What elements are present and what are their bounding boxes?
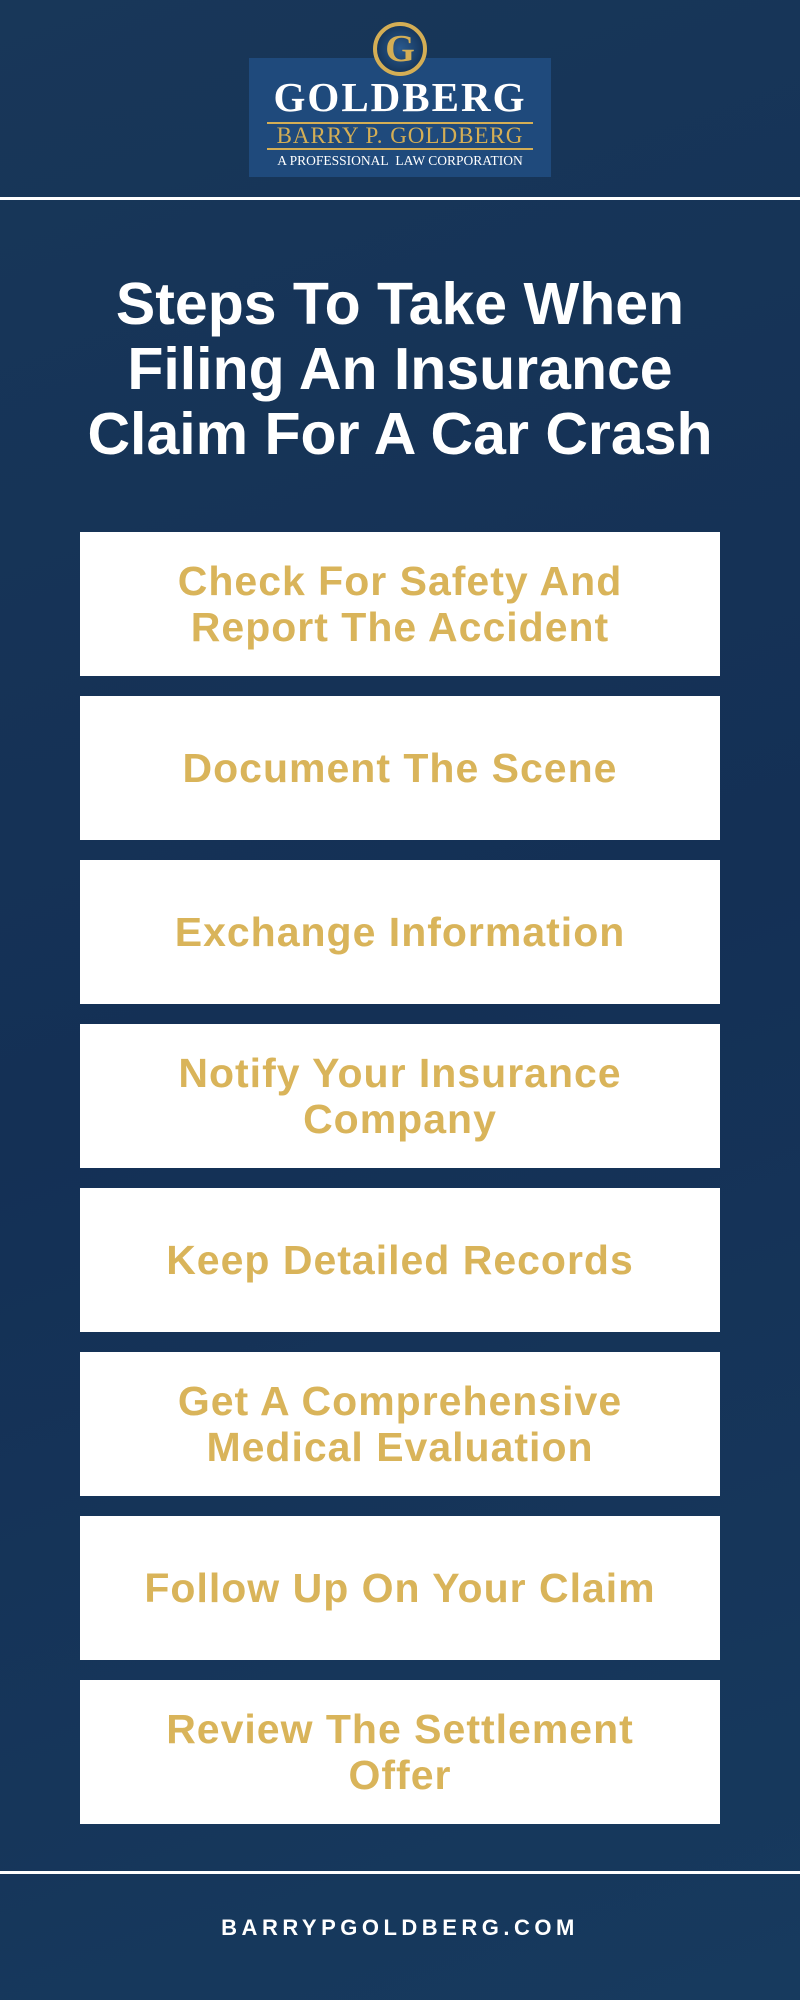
step 6 xyxy=(80,1352,720,1496)
step 1 xyxy=(80,532,720,676)
title xyxy=(87,271,713,467)
logo: BARRY P. GOLDBERG xyxy=(277,123,523,148)
step 1: Check For Safety And xyxy=(178,558,622,604)
step 4: Notify Your Insurance xyxy=(178,1050,622,1096)
step 4: Company xyxy=(303,1096,497,1142)
step 8: Review The Settlement xyxy=(166,1706,634,1752)
step 3 xyxy=(80,860,720,1004)
title: Filing An Insurance xyxy=(127,336,673,402)
footer url: BARRYPGOLDBERG.COM xyxy=(221,1915,579,1940)
icon: G medallion xyxy=(373,22,427,76)
step 5 xyxy=(80,1188,720,1332)
title: Steps To Take When xyxy=(116,271,684,337)
logo: GOLDBERG xyxy=(274,74,526,120)
step 1: Report The Accident xyxy=(191,604,609,650)
step 2: Document The Scene xyxy=(183,745,617,791)
step 4 xyxy=(80,1024,720,1168)
step 8: Offer xyxy=(348,1752,451,1798)
logo xyxy=(249,22,551,177)
step 7 xyxy=(80,1516,720,1660)
step 6: Medical Evaluation xyxy=(206,1424,594,1470)
step 8 xyxy=(80,1680,720,1824)
logo: A PROFESSIONAL LAW CORPORATION xyxy=(277,153,523,168)
step 2 xyxy=(80,696,720,840)
step 7: Follow Up On Your Claim xyxy=(144,1565,656,1611)
icon: G medallion: G xyxy=(385,28,415,70)
step 6: Get A Comprehensive xyxy=(178,1378,622,1424)
step 3: Exchange Information xyxy=(175,909,625,955)
title: Claim For A Car Crash xyxy=(87,401,713,467)
step 5: Keep Detailed Records xyxy=(166,1237,634,1283)
